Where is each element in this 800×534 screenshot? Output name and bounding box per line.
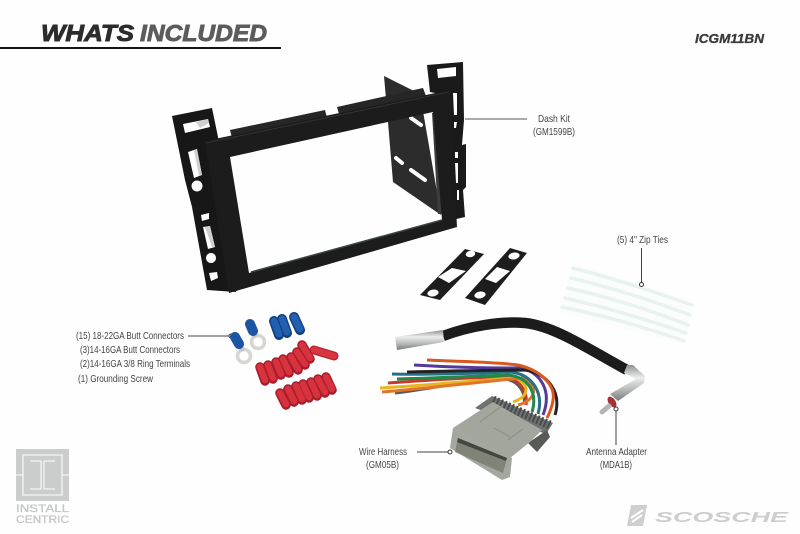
install centric logo: INSTALL (16, 503, 69, 515)
antenna adapter (395, 323, 645, 412)
connector top face (453, 402, 542, 458)
right-angle plug (610, 365, 645, 401)
blue butt connectors (274, 317, 300, 335)
zip ties label (617, 234, 668, 286)
dash kit label: Dash Kit (538, 113, 570, 125)
scosche logo (627, 505, 790, 526)
connectors label: (2)14-16GA 3/8 Ring Terminals (80, 358, 190, 370)
dash kit label: (GM1599B) (533, 126, 575, 138)
antenna adapter label: Antenna Adapter (586, 446, 647, 458)
pin (602, 406, 609, 412)
logo mark (16, 449, 69, 501)
dash kit label (465, 113, 575, 138)
scosche icon (627, 505, 647, 526)
bracket 2 (465, 248, 527, 305)
title (0, 20, 281, 49)
cable (443, 323, 627, 370)
wire harness label (359, 446, 452, 471)
ring terminals (235, 324, 264, 362)
top face details (480, 405, 523, 440)
install centric logo (16, 449, 69, 526)
wire harness label: (GM05B) (366, 459, 399, 471)
left bracket (172, 108, 236, 292)
title: WHATS (41, 20, 135, 46)
barrel connector (395, 330, 444, 350)
connectors label: (15) 18-22GA Butt Connectors (76, 330, 184, 342)
connectors label: (3)14-16GA Butt Connectors (80, 344, 180, 356)
mounting brackets (420, 248, 527, 305)
red butt connectors (260, 345, 334, 405)
antenna adapter label (586, 407, 647, 471)
wires (380, 360, 557, 418)
top clips (230, 88, 426, 138)
socket opening (455, 438, 507, 473)
socket dark band (457, 438, 507, 461)
side clip (528, 430, 550, 452)
ring terminals and butt connectors (235, 317, 334, 405)
zip ties (558, 262, 695, 345)
title: INCLUDED (140, 20, 267, 46)
connector front (450, 428, 512, 480)
right bracket (427, 62, 466, 220)
scosche logo: SCOSCHE (655, 509, 790, 526)
wire harness (380, 360, 557, 480)
bracket 1 (420, 249, 484, 300)
connector ribs (475, 396, 553, 434)
red ring (606, 395, 618, 409)
rear mounting plate (384, 76, 447, 215)
antenna adapter label: (MDA1B) (600, 459, 632, 471)
dash kit image (172, 62, 466, 293)
zip ties label: (5) 4" Zip Ties (617, 234, 668, 246)
wire harness label: Wire Harness (359, 446, 407, 458)
install centric logo: CENTRIC (16, 514, 69, 526)
model number: ICGM11BN (695, 31, 765, 46)
bezel frame (205, 90, 457, 293)
connectors label: (1) Grounding Screw (78, 373, 153, 385)
connectors label (76, 330, 233, 385)
